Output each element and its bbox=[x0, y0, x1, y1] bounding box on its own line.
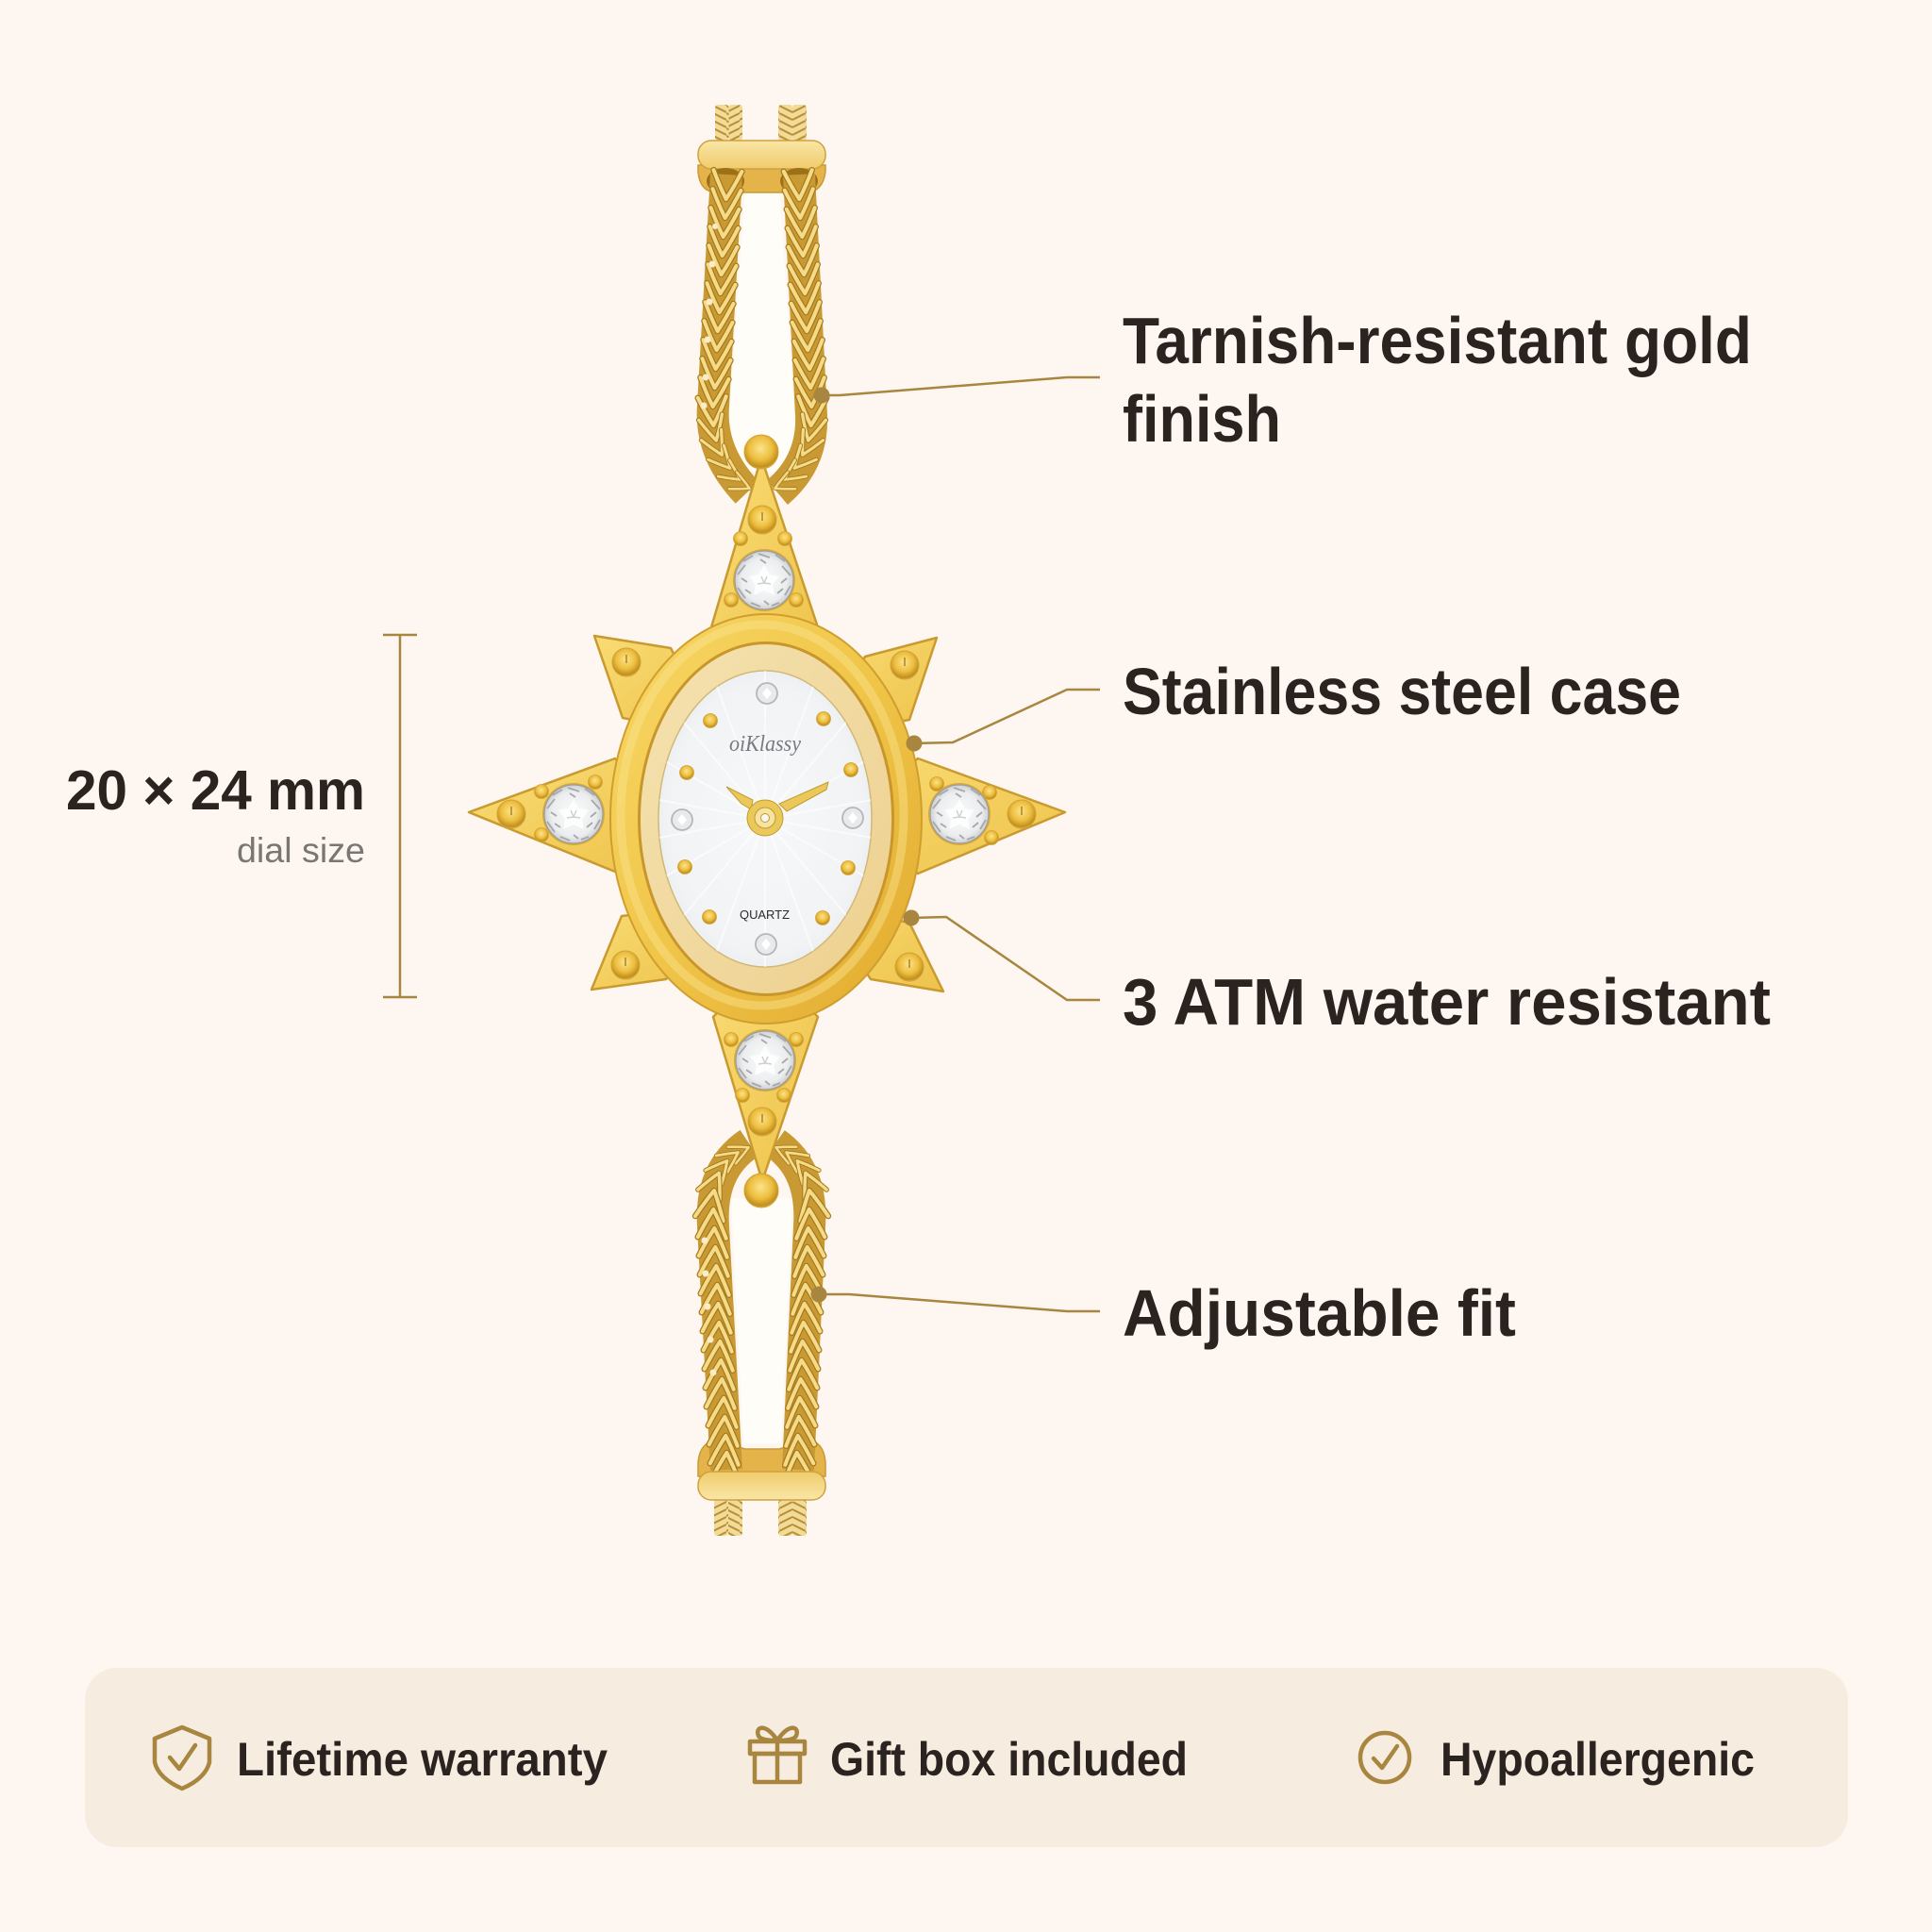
callout: stainless steel case: Stainless steel case bbox=[1123, 655, 1681, 728]
dial size dimension bbox=[66, 635, 417, 997]
icon: gift box bbox=[750, 1728, 805, 1782]
benefit: lifetime warranty: Lifetime warranty bbox=[237, 1733, 608, 1786]
callout: tarnish-resistant: finish bbox=[1123, 382, 1281, 456]
watch product illustration bbox=[469, 105, 1065, 1536]
dial brand: oiKlassy bbox=[729, 732, 801, 757]
spike studs and stones bbox=[497, 435, 1036, 1208]
star body with spikes bbox=[469, 458, 1065, 1181]
benefit: lifetime warranty bbox=[155, 1727, 608, 1789]
top bracelet section bbox=[698, 105, 826, 496]
callout: adjustable fit bbox=[811, 1276, 1516, 1350]
watch hands bbox=[726, 782, 828, 836]
dial face bbox=[658, 670, 873, 968]
benefit: gift box: Gift box included bbox=[830, 1733, 1188, 1786]
benefit: hypoallergenic: Hypoallergenic bbox=[1441, 1733, 1755, 1786]
callout: stainless steel case bbox=[906, 655, 1681, 751]
icon: check circle bbox=[1360, 1733, 1409, 1782]
dial label quartz: QUARTZ bbox=[740, 908, 790, 922]
callout: tarnish-resistant bbox=[813, 304, 1752, 456]
icon: shield check bbox=[155, 1727, 209, 1789]
callout: water resistant bbox=[904, 909, 1771, 1039]
callout: tarnish-resistant: Tarnish-resistant gold bbox=[1123, 304, 1752, 377]
panel: footer benefits bbox=[85, 1668, 1848, 1847]
case and bezel bbox=[610, 614, 922, 1024]
dial size dimension: dial size bbox=[237, 831, 365, 870]
callout: water resistant: 3 ATM water resistant bbox=[1123, 965, 1771, 1039]
bottom bracelet section bbox=[695, 1140, 828, 1536]
callout: adjustable fit: Adjustable fit bbox=[1123, 1276, 1516, 1350]
dial size dimension: 20 × 24 mm bbox=[66, 759, 365, 822]
